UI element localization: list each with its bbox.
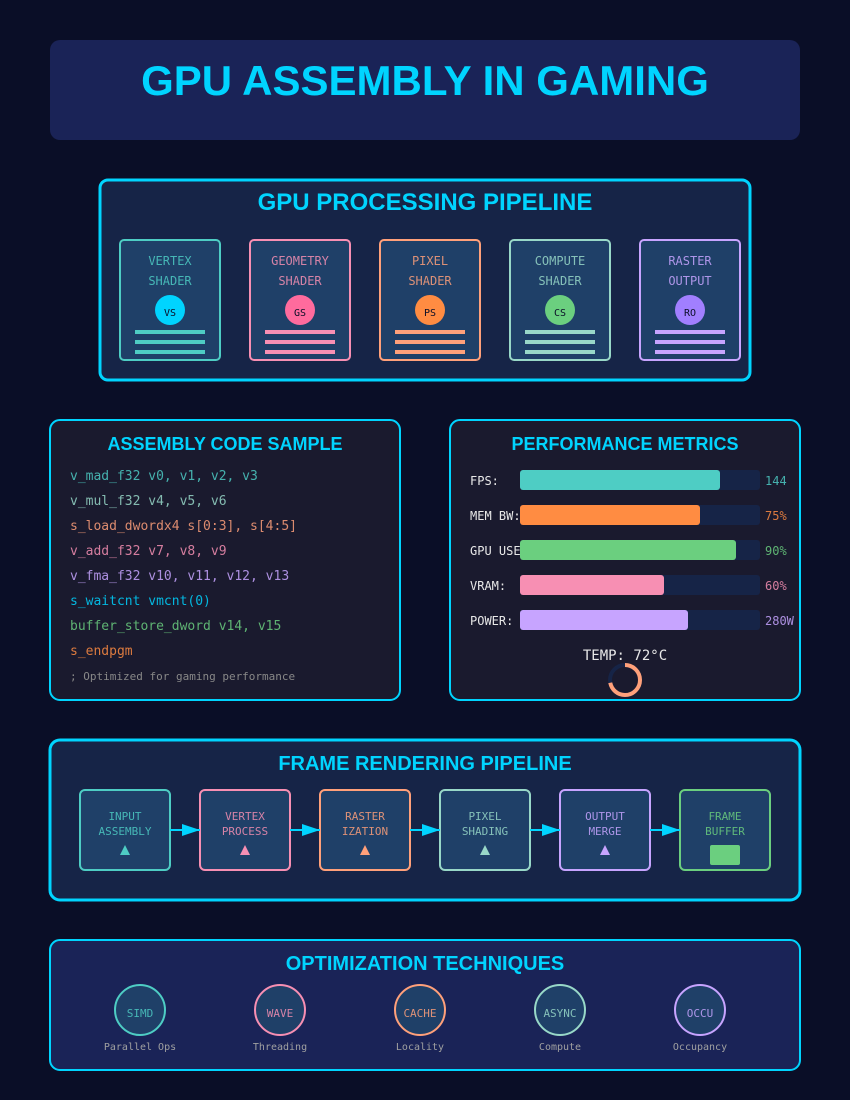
step: frame buffer: BUFFER — [705, 825, 745, 838]
metric: VRAM — [470, 575, 787, 595]
metric: VRAM: 60% — [765, 579, 787, 593]
raster output card: RO — [684, 308, 696, 319]
step: frame buffer — [680, 790, 770, 870]
step: output merge — [560, 790, 650, 870]
step: rasterization: IZATION — [342, 825, 388, 838]
technique: wave: Threading — [253, 1042, 307, 1053]
step: input assembly: INPUT — [108, 810, 142, 823]
vertex shader card: VERTEX — [148, 254, 192, 268]
vertex shader card: SHADER — [148, 274, 192, 288]
technique: wave: WAVE — [267, 1007, 293, 1020]
metric: memory bandwidth: MEM BW: — [470, 509, 521, 523]
step: output merge: MERGE — [588, 825, 622, 838]
technique: wave — [253, 985, 307, 1053]
title banner: GPU ASSEMBLY IN GAMING — [141, 57, 709, 104]
metric: memory bandwidth — [470, 505, 787, 525]
pixel shader card: PIXEL — [412, 254, 448, 268]
panel: GPU processing pipeline — [100, 180, 750, 380]
code lines: s_load_dwordx4 s[0:3], s[4:5] — [70, 519, 297, 534]
technique: async: ASYNC — [543, 1007, 577, 1020]
title banner — [50, 40, 800, 140]
technique: SIMD: SIMD — [127, 1007, 153, 1020]
compute shader card — [510, 240, 610, 360]
panel: optimization techniques — [50, 940, 800, 1070]
step: pixel shading — [440, 790, 530, 870]
metric: FPS: FPS: — [470, 474, 499, 488]
panel: optimization techniques: OPTIMIZATION TECHNIQUES — [286, 953, 564, 975]
step: output merge: OUTPUT — [585, 810, 625, 823]
metric: memory bandwidth: 75% — [765, 509, 787, 523]
raster output card: RASTER — [668, 254, 712, 268]
metric: GPU use — [470, 540, 787, 560]
pixel shader card — [380, 240, 480, 360]
arrows between steps — [170, 829, 680, 831]
raster output card: OUTPUT — [668, 274, 712, 288]
vertex shader card — [120, 240, 220, 360]
temperature gauge — [610, 665, 640, 695]
geometry shader card: SHADER — [278, 274, 322, 288]
panel: performance metrics: PERFORMANCE METRICS — [511, 434, 739, 454]
technique: occupancy: OCCU — [687, 1007, 713, 1020]
metric: power — [470, 610, 795, 630]
panel: performance metrics — [450, 420, 800, 700]
step: vertex process: VERTEX — [225, 810, 265, 823]
metric: power: 280W — [765, 614, 795, 628]
step: rasterization — [320, 790, 410, 870]
compute shader card: CS — [554, 308, 566, 319]
compute shader card: SHADER — [538, 274, 582, 288]
step: frame buffer: FRAME — [708, 810, 742, 823]
step: input assembly — [80, 790, 170, 870]
technique: SIMD: Parallel Ops — [104, 1042, 176, 1053]
code lines: v_fma_f32 v10, v11, v12, v13 — [70, 569, 289, 584]
technique: cache: CACHE — [403, 1007, 437, 1020]
technique: async — [535, 985, 585, 1053]
pixel shader card: SHADER — [408, 274, 452, 288]
step: pixel shading: PIXEL — [468, 810, 502, 823]
metric: power: POWER: — [470, 614, 513, 628]
technique: async: Compute — [539, 1042, 581, 1053]
technique: cache: Locality — [396, 1042, 444, 1053]
code lines: v_mad_f32 v0, v1, v2, v3 — [70, 469, 258, 484]
code lines: v_mul_f32 v4, v5, v6 — [70, 494, 227, 509]
step: vertex process: PROCESS — [222, 825, 268, 838]
panel: assembly code sample — [50, 420, 400, 700]
technique: occupancy — [673, 985, 727, 1053]
step: vertex process — [200, 790, 290, 870]
code lines: v_add_f32 v7, v8, v9 — [70, 544, 227, 559]
metric: GPU use: GPU USE: — [470, 544, 528, 558]
technique: cache — [395, 985, 445, 1053]
code lines — [70, 469, 297, 659]
metric: FPS — [470, 470, 787, 490]
metric: VRAM: VRAM: — [470, 579, 506, 593]
step: pixel shading: SHADING — [462, 825, 508, 838]
panel: GPU processing pipeline: GPU PROCESSING PIPELINE — [258, 189, 592, 216]
compute shader card: COMPUTE — [535, 254, 585, 268]
step: rasterization: RASTER — [345, 810, 385, 823]
panel: frame rendering pipeline: FRAME RENDERING PIPELINE — [278, 753, 572, 775]
technique: occupancy: Occupancy — [673, 1042, 727, 1053]
panel: assembly code sample: ASSEMBLY CODE SAMPLE — [107, 434, 343, 454]
geometry shader card: GEOMETRY — [271, 254, 330, 268]
code lines: s_waitcnt vmcnt(0) — [70, 594, 211, 609]
raster output card — [640, 240, 740, 360]
vertex shader card: VS — [164, 308, 176, 319]
step: input assembly: ASSEMBLY — [99, 825, 152, 838]
code comment: ; Optimized for gaming performance — [70, 670, 295, 683]
pixel shader card: PS — [424, 308, 436, 319]
metric: FPS: 144 — [765, 474, 787, 488]
technique: SIMD — [104, 985, 176, 1053]
metric: GPU use: 90% — [765, 544, 787, 558]
temperature label: TEMP: 72°C — [583, 648, 667, 664]
code lines: buffer_store_dword v14, v15 — [70, 619, 281, 634]
geometry shader card — [250, 240, 350, 360]
code lines: s_endpgm — [70, 644, 133, 659]
geometry shader card: GS — [294, 308, 306, 319]
panel: frame rendering pipeline — [50, 740, 800, 900]
